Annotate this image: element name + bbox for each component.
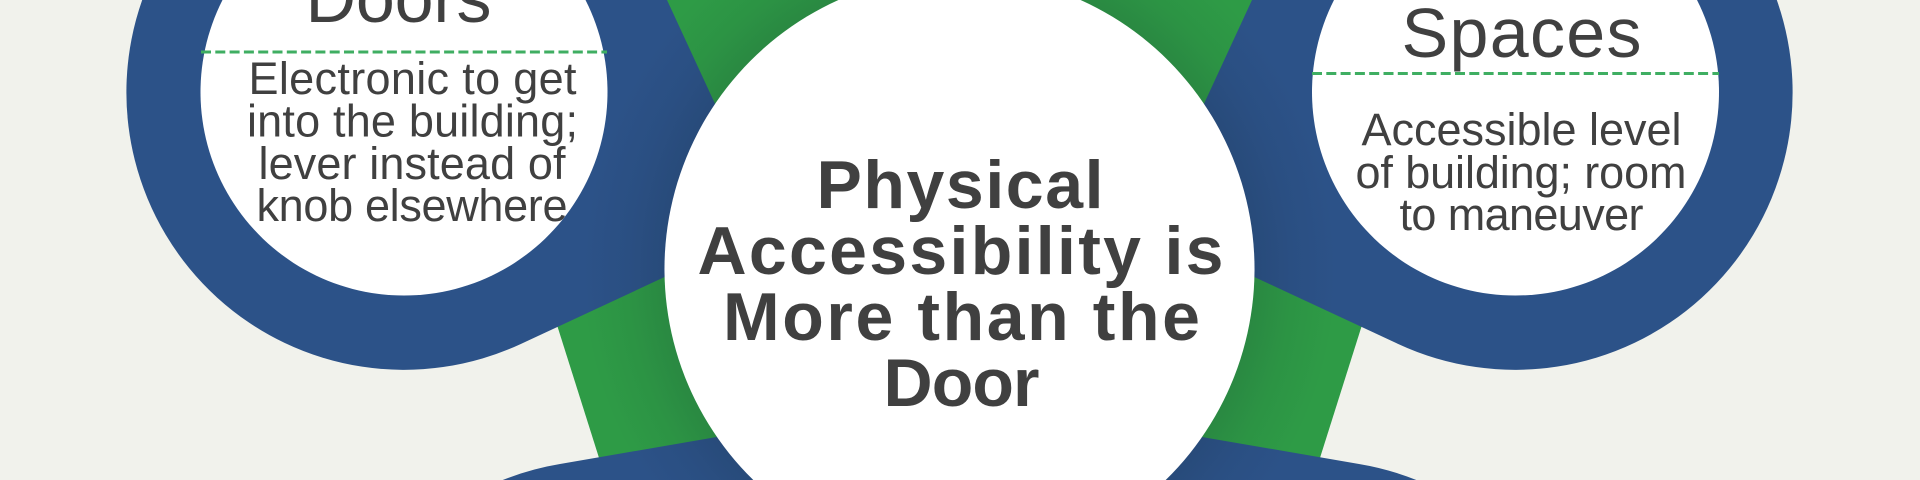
green connector shape (505, 0, 1414, 480)
soft shadow around central circle (581, 0, 1338, 480)
dashed divider: doors (201, 50, 607, 54)
panel: spaces teardrop (1147, 0, 1793, 370)
panel: bottom right teardrop (1075, 417, 1416, 480)
title: Physical (816, 147, 1104, 223)
title: Door (884, 345, 1040, 421)
blue ring: doors (126, 0, 772, 370)
text: doors detail: lever instead of (258, 138, 566, 189)
text: spaces detail: to maneuver (1400, 189, 1644, 240)
panel: doors teardrop (126, 0, 772, 370)
inner circle: doors (200, 0, 608, 296)
text: doors detail (247, 53, 578, 231)
panel: bottom left teardrop (503, 417, 844, 480)
title (698, 147, 1224, 421)
text: doors detail: Electronic to get (248, 53, 577, 104)
text: spaces detail (1356, 104, 1686, 240)
text: spaces detail: Accessible level (1362, 104, 1682, 155)
text: spaces detail: of building; room (1356, 147, 1686, 198)
inner circle: spaces (1312, 0, 1719, 296)
title: More than the (723, 279, 1200, 355)
text: doors detail: knob elsewhere (256, 180, 568, 231)
blue ring: spaces (1147, 0, 1793, 370)
dashed divider: spaces (1312, 72, 1719, 75)
central circle (664, 0, 1255, 480)
text: doors detail: into the building; (247, 96, 578, 146)
title: Accessibility is (698, 213, 1224, 289)
